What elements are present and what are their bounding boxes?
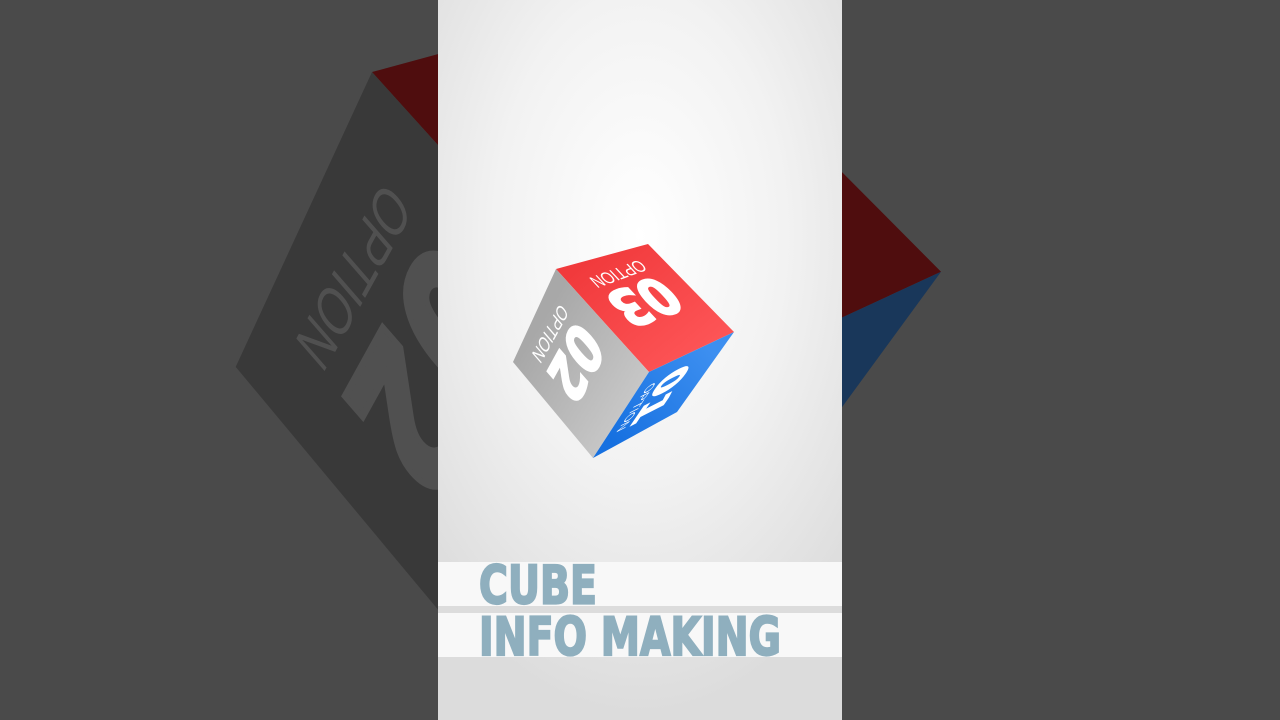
blue face: option 01: 01 — [620, 357, 702, 433]
title line 1: CUBE — [479, 556, 597, 616]
enlarged background cube — [236, 0, 941, 671]
cube — [513, 244, 734, 458]
red face: option 03: 03 — [591, 265, 696, 337]
blue face: option 01 — [593, 332, 734, 458]
background cube gray face label: 02 — [309, 192, 556, 543]
title band: INFO MAKING — [438, 607, 842, 668]
title band: CUBE — [438, 556, 842, 616]
blue face: option 01: OPTION — [612, 380, 659, 435]
gray face: option 02: 02 — [536, 307, 614, 417]
center panel background — [438, 0, 842, 720]
band divider — [438, 606, 842, 613]
title line 2: INFO MAKING — [479, 607, 781, 668]
gray face: option 02: OPTION — [529, 299, 572, 368]
background cube gray face label: OPTION — [286, 169, 422, 385]
red face: option 03 — [556, 244, 734, 372]
red face: option 03: OPTION — [585, 256, 651, 291]
gray face: option 02 — [513, 269, 649, 458]
